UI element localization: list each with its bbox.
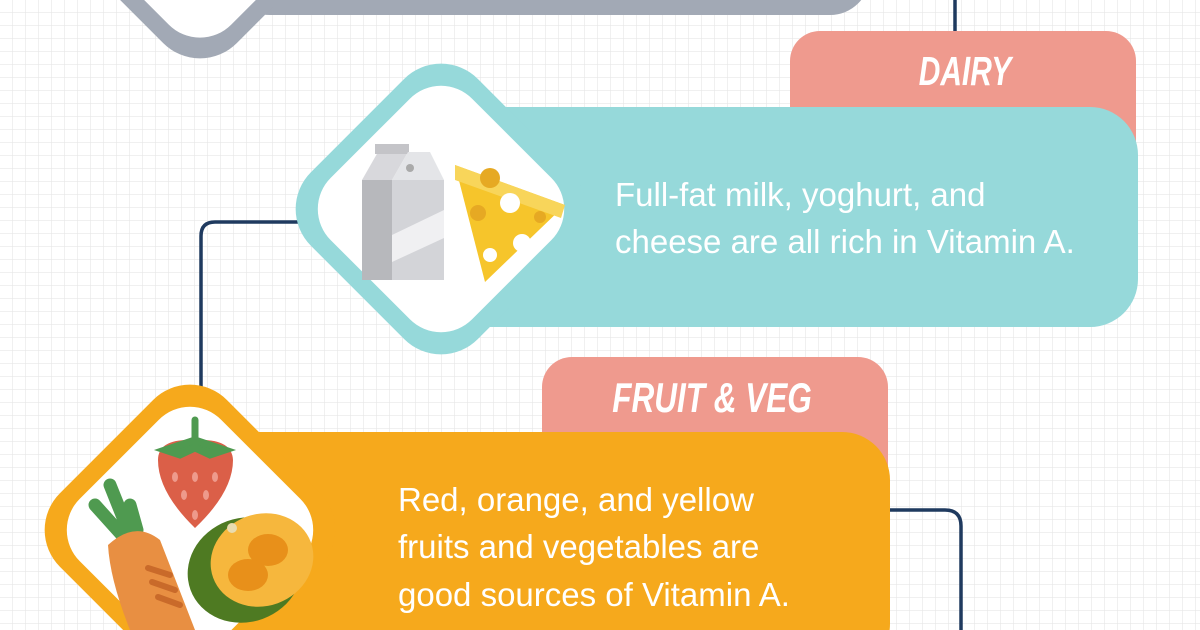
text: dairy description: Full-fat milk, yoghurt, and (615, 176, 985, 213)
panel: dairy (274, 31, 1138, 376)
text: dairy description (615, 176, 1075, 260)
tab: dairy (790, 31, 1136, 181)
text: fruit & veg description: fruits and vegetables are (398, 528, 759, 565)
connector lines (201, 0, 961, 630)
text: fruit & veg description: Red, orange, and yellow (398, 481, 754, 518)
panel: top grey item (33, 0, 870, 80)
tab: fruit & veg (542, 357, 888, 507)
text: dairy description: cheese are all rich in Vitamin A. (615, 223, 1075, 260)
text: fruit & veg description (398, 481, 790, 613)
tab: fruit & veg: FRUIT & VEG (612, 374, 812, 421)
icon: carrot (95, 485, 195, 630)
icon: cheese (455, 165, 565, 282)
icon: milk carton (362, 144, 444, 280)
icon: strawberry (158, 420, 233, 528)
panel: fruit and veg (23, 357, 890, 630)
tab: dairy: DAIRY (919, 48, 1014, 94)
icon: pumpkin (173, 499, 327, 630)
text: fruit & veg description: good sources of Vitamin A. (398, 576, 790, 613)
